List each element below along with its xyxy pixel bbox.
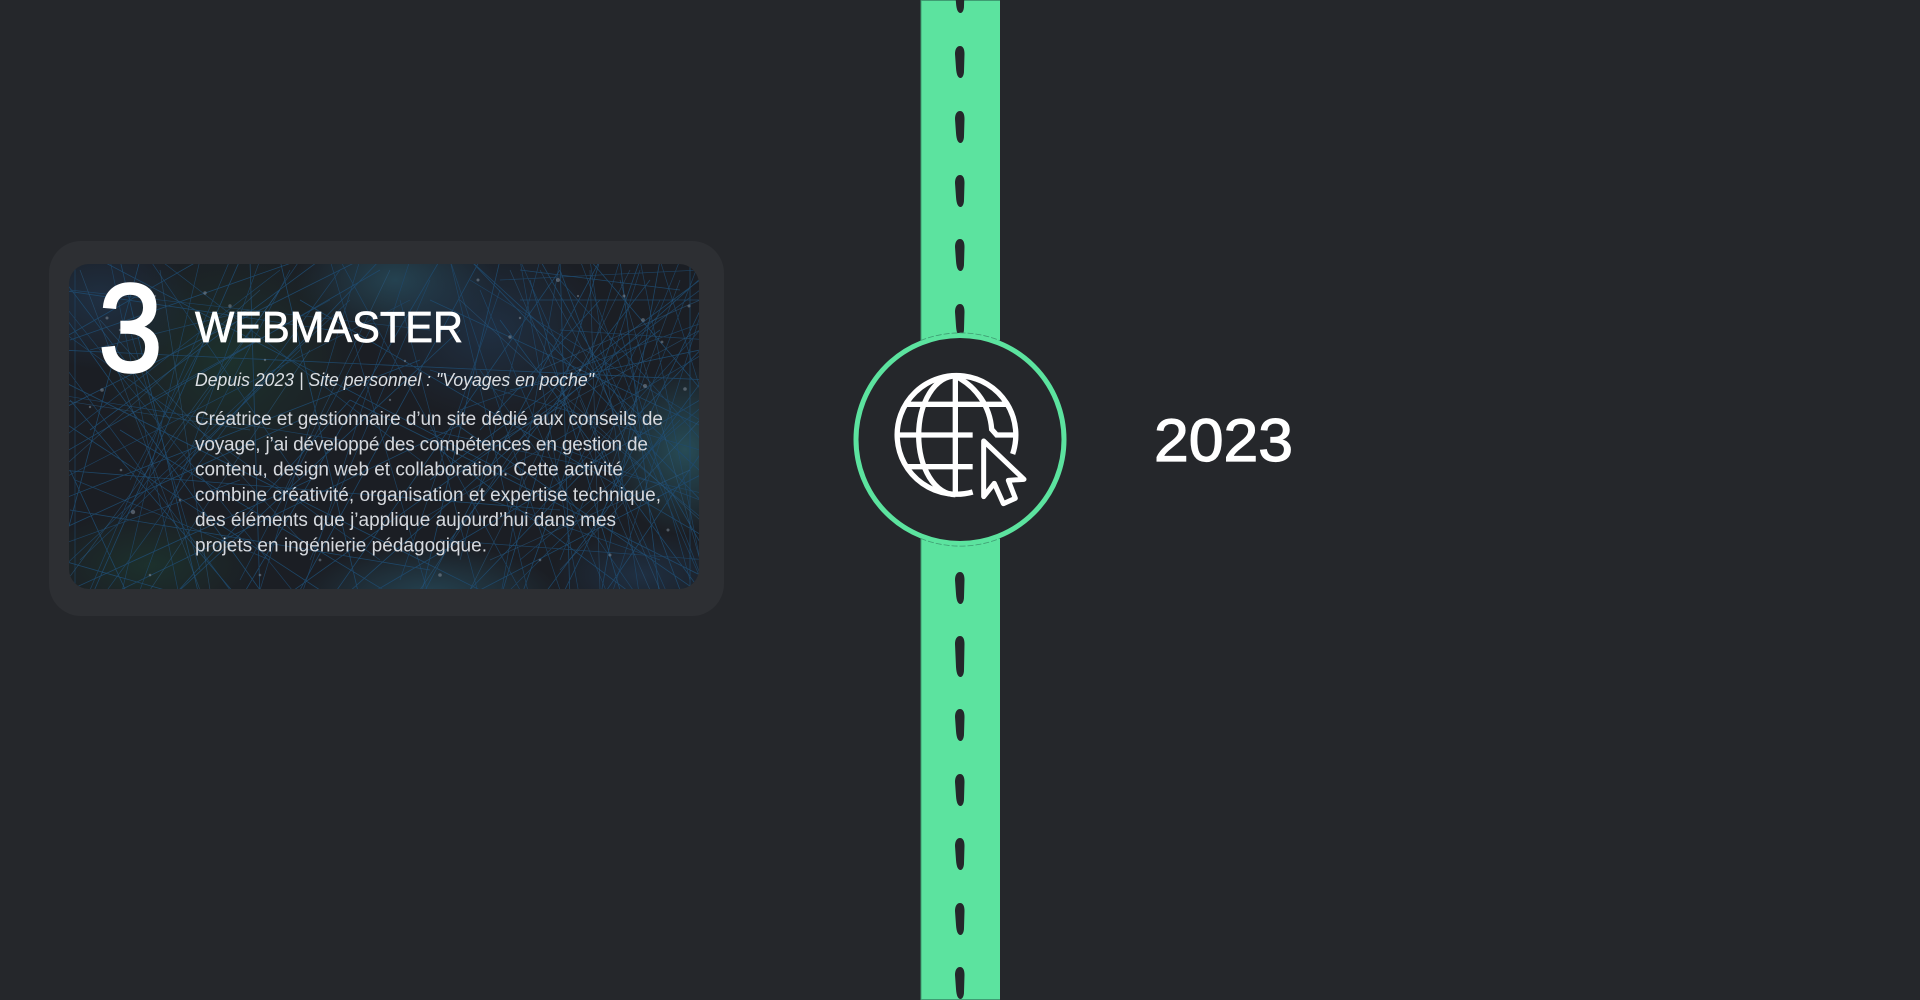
body text: Créatrice et gestionnaire d’un site dédié aux conseils de [195, 409, 663, 430]
body text [195, 409, 663, 556]
body text: des éléments que j’applique aujourd’hui dans mes [195, 510, 616, 531]
body text: voyage, j’ai développé des compétences en gestion de [195, 434, 648, 455]
body text: projets en ingénierie pédagogique. [195, 536, 487, 556]
subtitle: Depuis 2023 | Site personnel : "Voyages en poche" [195, 369, 595, 390]
big number 3: 3 [99, 260, 162, 398]
body text: combine créativité, organisation et expertise technique, [195, 485, 661, 506]
year label: 2023 [1154, 407, 1293, 474]
road: vertical green timeline [920, 0, 1000, 1000]
card network background image [69, 264, 699, 589]
timeline infographic canvas [69, 0, 1291, 1000]
icon: cursor arrow [984, 441, 1024, 504]
body text: contenu, design web et collaboration. Cette activité [195, 460, 623, 481]
panel: webmaster card [69, 264, 699, 589]
icon badge: globe with cursor [856, 333, 1064, 546]
road centre dashes [955, 0, 964, 999]
icon: globe [896, 376, 1016, 495]
heading: WEBMASTER [195, 303, 463, 352]
